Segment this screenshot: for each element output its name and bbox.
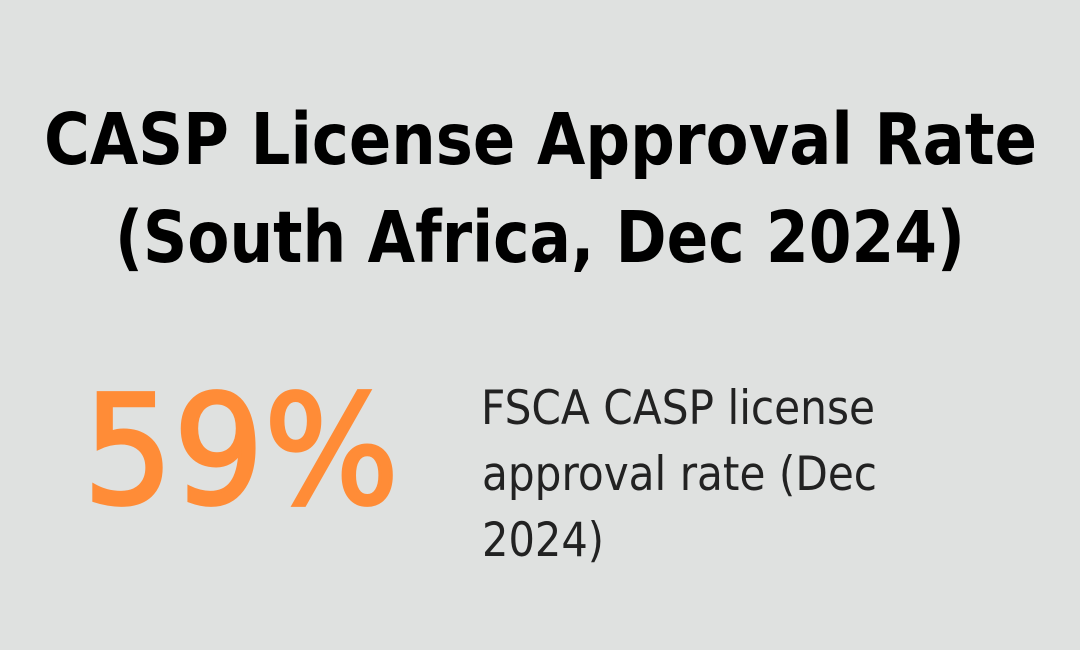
title: (South Africa, Dec 2024) <box>115 196 965 279</box>
title <box>44 98 1037 279</box>
description text: approval rate (Dec <box>482 447 877 502</box>
description text: 2024) <box>482 513 604 568</box>
description text <box>481 381 877 568</box>
big stat: 59%: 59% <box>83 363 399 539</box>
description text: FSCA CASP license <box>481 381 875 436</box>
